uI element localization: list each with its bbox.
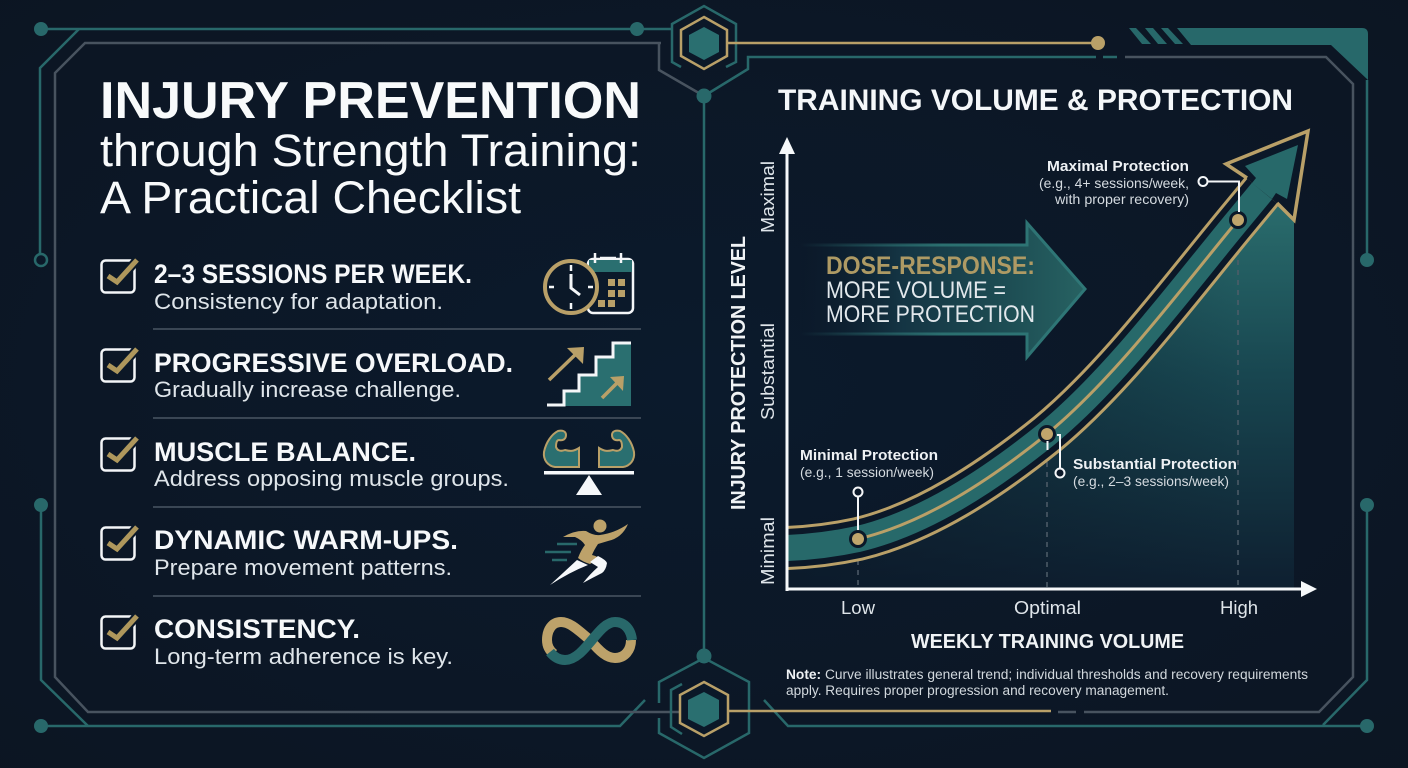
- x axis ticks: High: [1220, 598, 1258, 618]
- protection curve: [787, 131, 1308, 548]
- x axis title: WEEKLY TRAINING VOLUME: [911, 631, 1184, 653]
- guide lines: [858, 250, 1238, 587]
- callout: maximal: Maximal Protection: [1047, 158, 1189, 175]
- item: muscle balance: [102, 431, 634, 495]
- text: Prepare movement patterns.: [154, 555, 452, 580]
- text: Long-term adherence is key.: [154, 644, 453, 669]
- top right corner accent: [1129, 28, 1368, 80]
- icon: clock and calendar: [545, 253, 633, 313]
- curve arrowhead: [1226, 131, 1308, 220]
- title: INJURY PREVENTION: [100, 72, 641, 130]
- text: DYNAMIC WARM-UPS.: [154, 525, 458, 555]
- top hexagon emblem: [672, 6, 1105, 69]
- checkbox: [102, 438, 137, 470]
- text: PROGRESSIVE OVERLOAD.: [154, 348, 513, 378]
- item: consistency: [102, 614, 632, 669]
- callout: substantial: Substantial Protection: [1073, 456, 1237, 473]
- note: [786, 667, 1308, 698]
- area under curve: [787, 203, 1294, 589]
- y axis ticks: Minimal: [758, 517, 778, 585]
- text: Address opposing muscle groups.: [154, 466, 509, 491]
- y axis ticks: Maximal: [758, 161, 778, 233]
- text: [154, 525, 458, 580]
- y axis title: INJURY PROTECTION LEVEL: [728, 236, 750, 510]
- callout: substantial: (e.g., 2–3 sessions/week): [1073, 473, 1229, 489]
- item: sessions per week: [102, 253, 633, 314]
- dose-response arrow: MORE VOLUME =: [826, 277, 1006, 304]
- panel: chart: [728, 84, 1317, 698]
- x axis ticks: [841, 598, 1258, 618]
- text: MUSCLE BALANCE.: [154, 437, 416, 467]
- checkbox: [102, 260, 137, 292]
- dose-response arrow: [800, 223, 1085, 357]
- callout: maximal: with proper recovery): [1054, 191, 1189, 207]
- callout: minimal: [800, 447, 938, 548]
- checkbox: [102, 527, 137, 560]
- y axis ticks: Substantial: [758, 323, 778, 420]
- icon: rising stairs: [547, 343, 631, 406]
- icon: infinity: [547, 622, 632, 660]
- dividers: [153, 329, 641, 596]
- callout: maximal: (e.g., 4+ sessions/week,: [1039, 175, 1189, 191]
- checkbox: [102, 349, 137, 382]
- title: through Strength Training:: [100, 125, 641, 176]
- callout: minimal: (e.g., 1 session/week): [800, 464, 934, 480]
- title: A Practical Checklist: [100, 172, 522, 223]
- text: CONSISTENCY.: [154, 614, 360, 644]
- text: [154, 259, 472, 314]
- text: [154, 348, 513, 402]
- icon: runner: [545, 520, 628, 585]
- callout: substantial: [1038, 425, 1237, 489]
- y axis ticks: [758, 161, 778, 585]
- item: progressive overload: [102, 343, 631, 406]
- dose-response arrow: DOSE-RESPONSE:: [826, 252, 1035, 280]
- note: Note: Curve illustrates general trend; individual thresholds and recovery requirements: [786, 667, 1308, 682]
- text: [154, 437, 509, 491]
- callout: maximal: [1039, 158, 1247, 229]
- x axis ticks: Optimal: [1014, 598, 1081, 618]
- checkbox: [102, 616, 137, 648]
- bottom hexagon emblem: [659, 648, 1051, 758]
- note: apply. Requires proper progression and recovery management.: [786, 683, 1169, 698]
- title: [100, 72, 641, 223]
- text: Gradually increase challenge.: [154, 377, 461, 402]
- panel: checklist: [100, 72, 641, 669]
- icon: balanced biceps: [544, 431, 634, 495]
- chart heading: TRAINING VOLUME & PROTECTION: [778, 84, 1293, 117]
- callout: minimal: Minimal Protection: [800, 447, 938, 464]
- text: Consistency for adaptation.: [154, 289, 443, 314]
- dose-response arrow: MORE PROTECTION: [826, 301, 1035, 328]
- x axis ticks: Low: [841, 598, 876, 618]
- axes: [779, 137, 1317, 597]
- item: dynamic warm-ups: [102, 520, 628, 585]
- text: 2–3 SESSIONS PER WEEK.: [154, 259, 472, 289]
- text: [154, 614, 453, 669]
